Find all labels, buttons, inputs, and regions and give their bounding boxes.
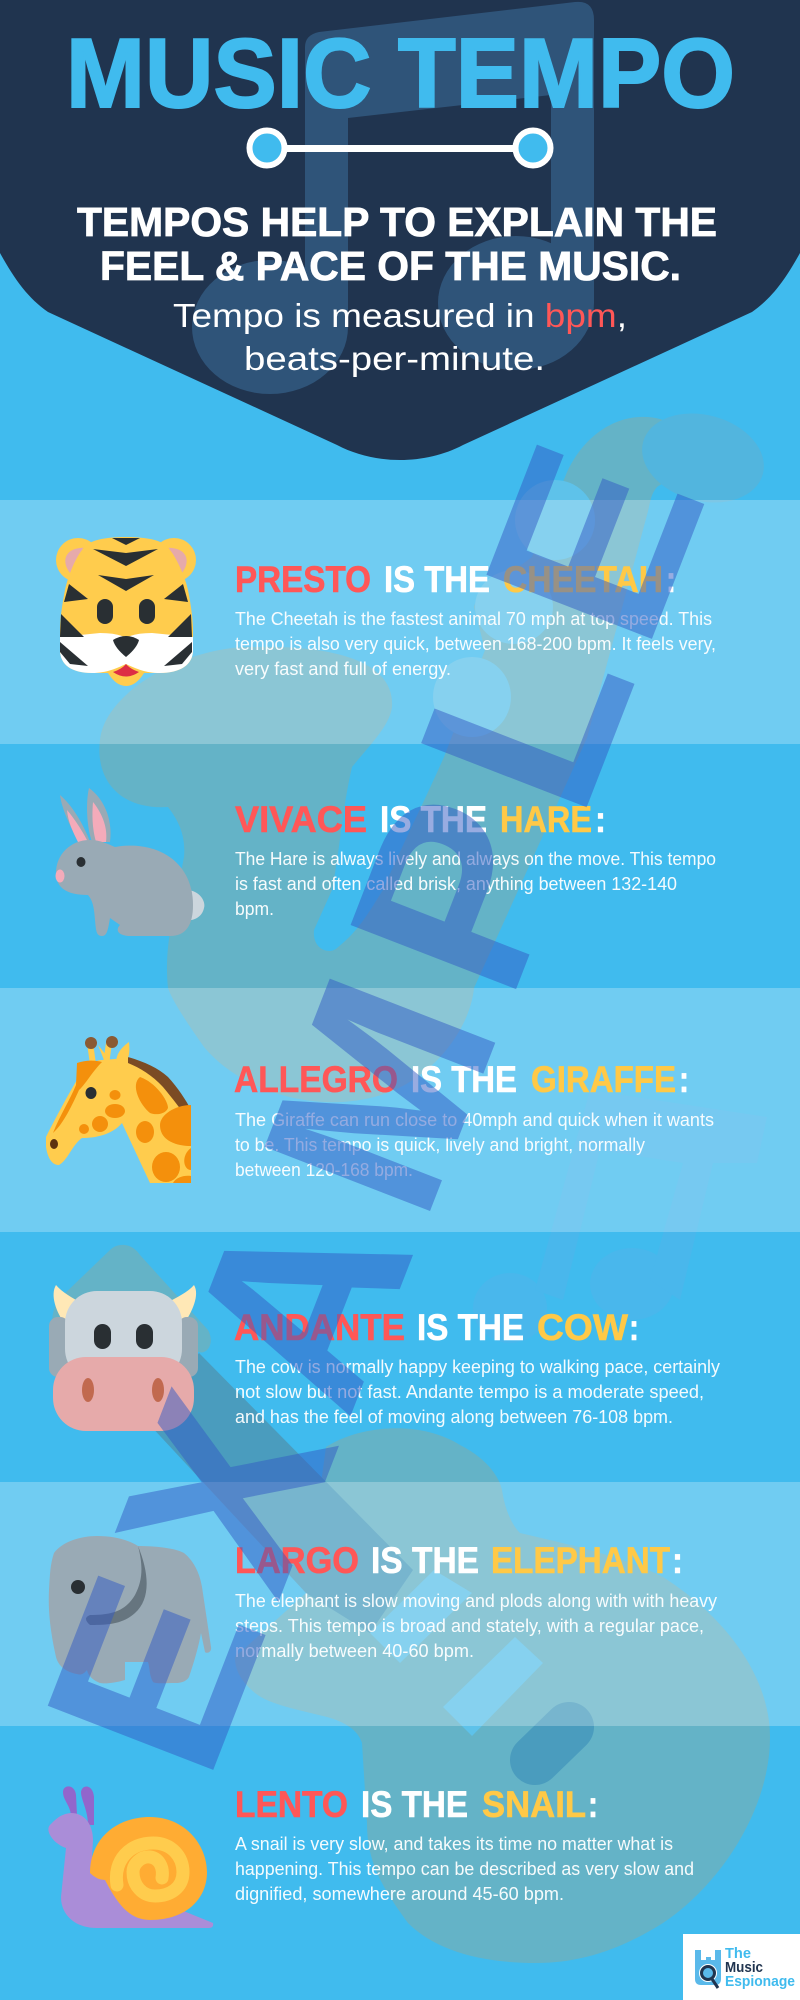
heading	[235, 1784, 598, 1825]
title: MUSIC TEMPO	[66, 18, 735, 128]
icon: snail	[48, 1786, 213, 1928]
body text: not slow but not fast. Andante tempo is a moderate speed,	[235, 1382, 704, 1402]
background faint music note	[473, 1090, 767, 1343]
body text: The cow is normally happy keeping to walking pace, certainly	[235, 1357, 720, 1377]
intro text: beats-per-minute.	[244, 340, 545, 377]
divider with circles	[250, 130, 550, 166]
body text: happening. This tempo can be described as very slow and	[235, 1859, 694, 1879]
body text: very fast and full of energy.	[235, 659, 451, 679]
body text	[235, 1591, 717, 1661]
panel: largo	[0, 1482, 800, 1726]
heading: SNAIL	[482, 1784, 586, 1825]
panel: andante	[49, 1285, 720, 1431]
logo	[683, 1934, 800, 2000]
heading: IS THE	[380, 799, 487, 840]
body text: steps. This tempo is broad and stately, with a regular pace,	[235, 1616, 704, 1636]
body text	[235, 1834, 694, 1904]
heading: HARE	[500, 799, 592, 840]
intro text	[173, 297, 627, 377]
body text: tempo is also very quick, between 168-200 bpm. It feels very,	[235, 634, 716, 654]
heading	[234, 1307, 639, 1348]
heading: :	[629, 1307, 639, 1348]
body text: and has the feel of moving along between 76-108 bpm.	[235, 1407, 673, 1427]
body text: dignified, somewhere around 45-60 bpm.	[235, 1884, 564, 1904]
body text: normally between 40-60 bpm.	[235, 1641, 474, 1661]
heading	[234, 1059, 689, 1100]
body text: between 120-168 bpm.	[235, 1160, 413, 1180]
heading: ELEPHANT	[491, 1540, 670, 1581]
heading: IS THE	[417, 1307, 524, 1348]
panel: allegro	[0, 988, 800, 1232]
body text: The Cheetah is the fastest animal 70 mph at top speed. This	[235, 609, 712, 629]
icon: music note watermark	[192, 2, 594, 394]
heading: IS THE	[371, 1540, 479, 1581]
heading: IS THE	[361, 1784, 468, 1825]
logo text: Music	[725, 1959, 763, 1976]
body text	[235, 849, 716, 919]
icon: logo mark	[695, 1950, 721, 1988]
heading: :	[672, 1540, 683, 1581]
subtitle: TEMPOS HELP TO EXPLAIN THE	[77, 199, 717, 245]
body text: is fast and often called brisk, anything between 132-140	[235, 874, 677, 894]
icon: tiger	[56, 537, 196, 686]
watermark text: EXAMPLE	[0, 389, 768, 1806]
icon: giraffe	[46, 1036, 191, 1183]
heading: PRESTO	[235, 559, 371, 600]
heading: GIRAFFE	[531, 1059, 676, 1100]
body text: to be. This tempo is quick, lively and bright, normally	[235, 1135, 645, 1155]
logo text: The	[725, 1945, 751, 1962]
icon: elephant	[49, 1536, 211, 1683]
heading: CHEETAH	[503, 559, 663, 600]
body text: The Hare is always lively and always on the move. This tempo	[235, 849, 716, 869]
heading: ALLEGRO	[234, 1059, 398, 1100]
header panel	[0, 0, 800, 460]
heading	[235, 1540, 683, 1581]
body text: bpm.	[235, 899, 274, 919]
panel: presto	[0, 500, 800, 744]
heading: COW	[537, 1307, 628, 1348]
body text: The Giraffe can run close to 40mph and quick when it wants	[235, 1110, 714, 1130]
subtitle	[77, 199, 717, 289]
heading: :	[666, 559, 676, 600]
heading: IS THE	[411, 1059, 517, 1100]
body text: A snail is very slow, and takes its time no matter what is	[235, 1834, 673, 1854]
panel: lento	[48, 1784, 694, 1928]
logo text	[725, 1945, 795, 1990]
intro text: Tempo is measured in bpm,	[173, 297, 627, 334]
heading: IS THE	[384, 559, 490, 600]
heading	[235, 559, 676, 600]
panel: vivace	[56, 788, 716, 936]
heading: :	[679, 1059, 689, 1100]
background guitar silhouette	[52, 400, 774, 1963]
icon: hare	[56, 788, 204, 936]
heading: :	[595, 799, 606, 840]
heading: LENTO	[235, 1784, 348, 1825]
heading: :	[588, 1784, 598, 1825]
body text	[235, 1357, 720, 1427]
icon: cow	[49, 1285, 198, 1431]
heading: VIVACE	[235, 799, 367, 840]
heading: LARGO	[235, 1540, 359, 1581]
body text	[235, 609, 716, 679]
heading: ANDANTE	[234, 1307, 405, 1348]
body text	[235, 1110, 714, 1180]
body text: The elephant is slow moving and plods along with with heavy	[235, 1591, 717, 1611]
logo text: Espionage	[725, 1973, 795, 1990]
subtitle: FEEL & PACE OF THE MUSIC.	[100, 243, 681, 289]
heading	[235, 799, 606, 840]
